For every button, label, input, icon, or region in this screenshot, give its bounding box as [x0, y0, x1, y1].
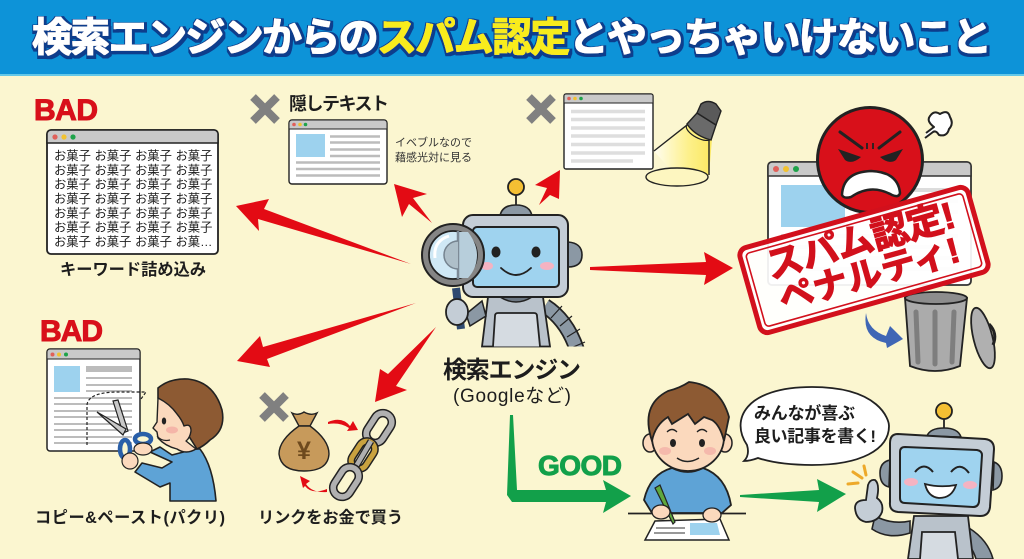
browser window with repeated keywords: お菓子 [54, 206, 91, 220]
BAD label 2: BAD [40, 315, 103, 348]
browser window with repeated keywords: お菓子 [94, 206, 131, 220]
small note text [395, 135, 472, 164]
browser window with repeated keywords: お菓子 [135, 206, 172, 220]
icon: steam puff [925, 112, 952, 138]
browser window with repeated keywords: お菓… [176, 235, 212, 249]
browser window with text lines [564, 94, 653, 169]
copy and paste caption: コピー&ペースト(パクリ) [35, 509, 225, 527]
search engine caption: 検索エンジン [443, 357, 581, 384]
browser window with repeated keywords: お菓子 [94, 220, 131, 234]
browser window with repeated keywords: お菓子 [176, 192, 212, 206]
boy with scissors [97, 379, 223, 501]
small browser window [289, 120, 387, 184]
browser window with repeated keywords: お菓子 [135, 235, 172, 249]
browser window with repeated keywords: お菓子 [54, 235, 91, 249]
browser window with repeated keywords: お菓子 [135, 164, 172, 178]
spam stamp: スパム認定! [762, 195, 960, 287]
browser window with repeated keywords: お菓子 [176, 206, 212, 220]
speech bubble [741, 387, 889, 465]
arrow: to paid links [375, 327, 436, 402]
arrow: good article to robot [740, 479, 846, 512]
panel: spotlight page [529, 94, 721, 186]
browser window with repeated keywords: お菓子 [94, 235, 131, 249]
browser window with repeated keywords: お菓子 [54, 149, 91, 163]
paid links caption: リンクをお金で買う [258, 508, 403, 527]
browser window with repeated keywords: お菓子 [176, 149, 212, 163]
spam stamp: ペナルティ! [774, 231, 964, 319]
header band [0, 0, 1024, 76]
arrow: to keyword stuffing [236, 199, 411, 264]
browser window with repeated keywords: お菓子 [94, 192, 131, 206]
speech bubble: みんなが喜ぶ [754, 403, 855, 423]
browser window with repeated keywords: お菓子 [135, 149, 172, 163]
icon: trash can [905, 292, 1000, 371]
arrow: money to links [328, 420, 358, 431]
panel: spam penalty [738, 108, 1000, 371]
arrow: good path green [507, 415, 631, 513]
browser window with repeated keywords: お菓子 [135, 220, 172, 234]
icon: gray cross [253, 97, 277, 121]
panel: paid links [258, 395, 403, 527]
panel: copy and paste [35, 315, 225, 527]
arrow: to spotlight page [535, 170, 560, 205]
robot: search engine with magnifier [422, 179, 585, 350]
browser window with repeated keywords: お菓子 [54, 220, 91, 234]
GOOD label: GOOD [538, 450, 622, 481]
icon: gray cross [529, 97, 553, 121]
browser window with repeated keywords: お菓子 [176, 164, 212, 178]
browser window with repeated keywords: お菓子 [54, 164, 91, 178]
browser window with repeated keywords: お菓子 [135, 178, 172, 192]
browser window with repeated keywords: お菓子 [94, 178, 131, 192]
penalised browser window [768, 162, 971, 285]
search engine caption [443, 357, 581, 407]
robot: happy thumbs up [848, 403, 1002, 559]
title: 検索エンジンからのスパム認定とやっちゃいけないこと [32, 16, 992, 60]
panel: hidden text [253, 94, 472, 184]
panel: keyword stuffing [34, 94, 218, 279]
BAD label 1: BAD [34, 94, 98, 127]
browser window being cut [47, 349, 146, 451]
arrow: to spam penalty [590, 252, 733, 285]
hidden text heading: 隠しテキスト [289, 94, 389, 114]
browser window with repeated keywords: お菓子 [94, 164, 131, 178]
speech bubble: 良い記事を書く! [754, 426, 876, 446]
small note text: イベブルなので [395, 135, 472, 149]
arrow: to hidden text [394, 184, 432, 223]
arrow: links to money [300, 476, 327, 492]
small note text: 藉感光対に見る [395, 150, 472, 164]
icon: chain links [330, 410, 395, 500]
search engine caption: (Googleなど) [453, 385, 571, 407]
spam stamp [738, 186, 990, 334]
browser window with repeated keywords: お菓子 [94, 149, 131, 163]
browser window with repeated keywords [47, 130, 218, 254]
arrow: into trash [865, 313, 903, 348]
boy writing [628, 382, 746, 540]
browser window with repeated keywords: お菓子 [176, 178, 212, 192]
icon: gray cross [262, 395, 286, 419]
browser window with repeated keywords: お菓子 [54, 178, 91, 192]
browser window with repeated keywords: お菓子 [176, 220, 212, 234]
keyword stuffing caption: キーワード詰め込み [60, 261, 206, 279]
browser window with repeated keywords: お菓子 [54, 192, 91, 206]
arrow: to copy and paste [237, 303, 416, 367]
icon: spotlight [646, 102, 721, 186]
icon: money bag: ¥ [297, 437, 311, 465]
browser window with repeated keywords: お菓子 [135, 192, 172, 206]
icon: money bag [279, 412, 329, 471]
icon: angry face [818, 108, 922, 212]
